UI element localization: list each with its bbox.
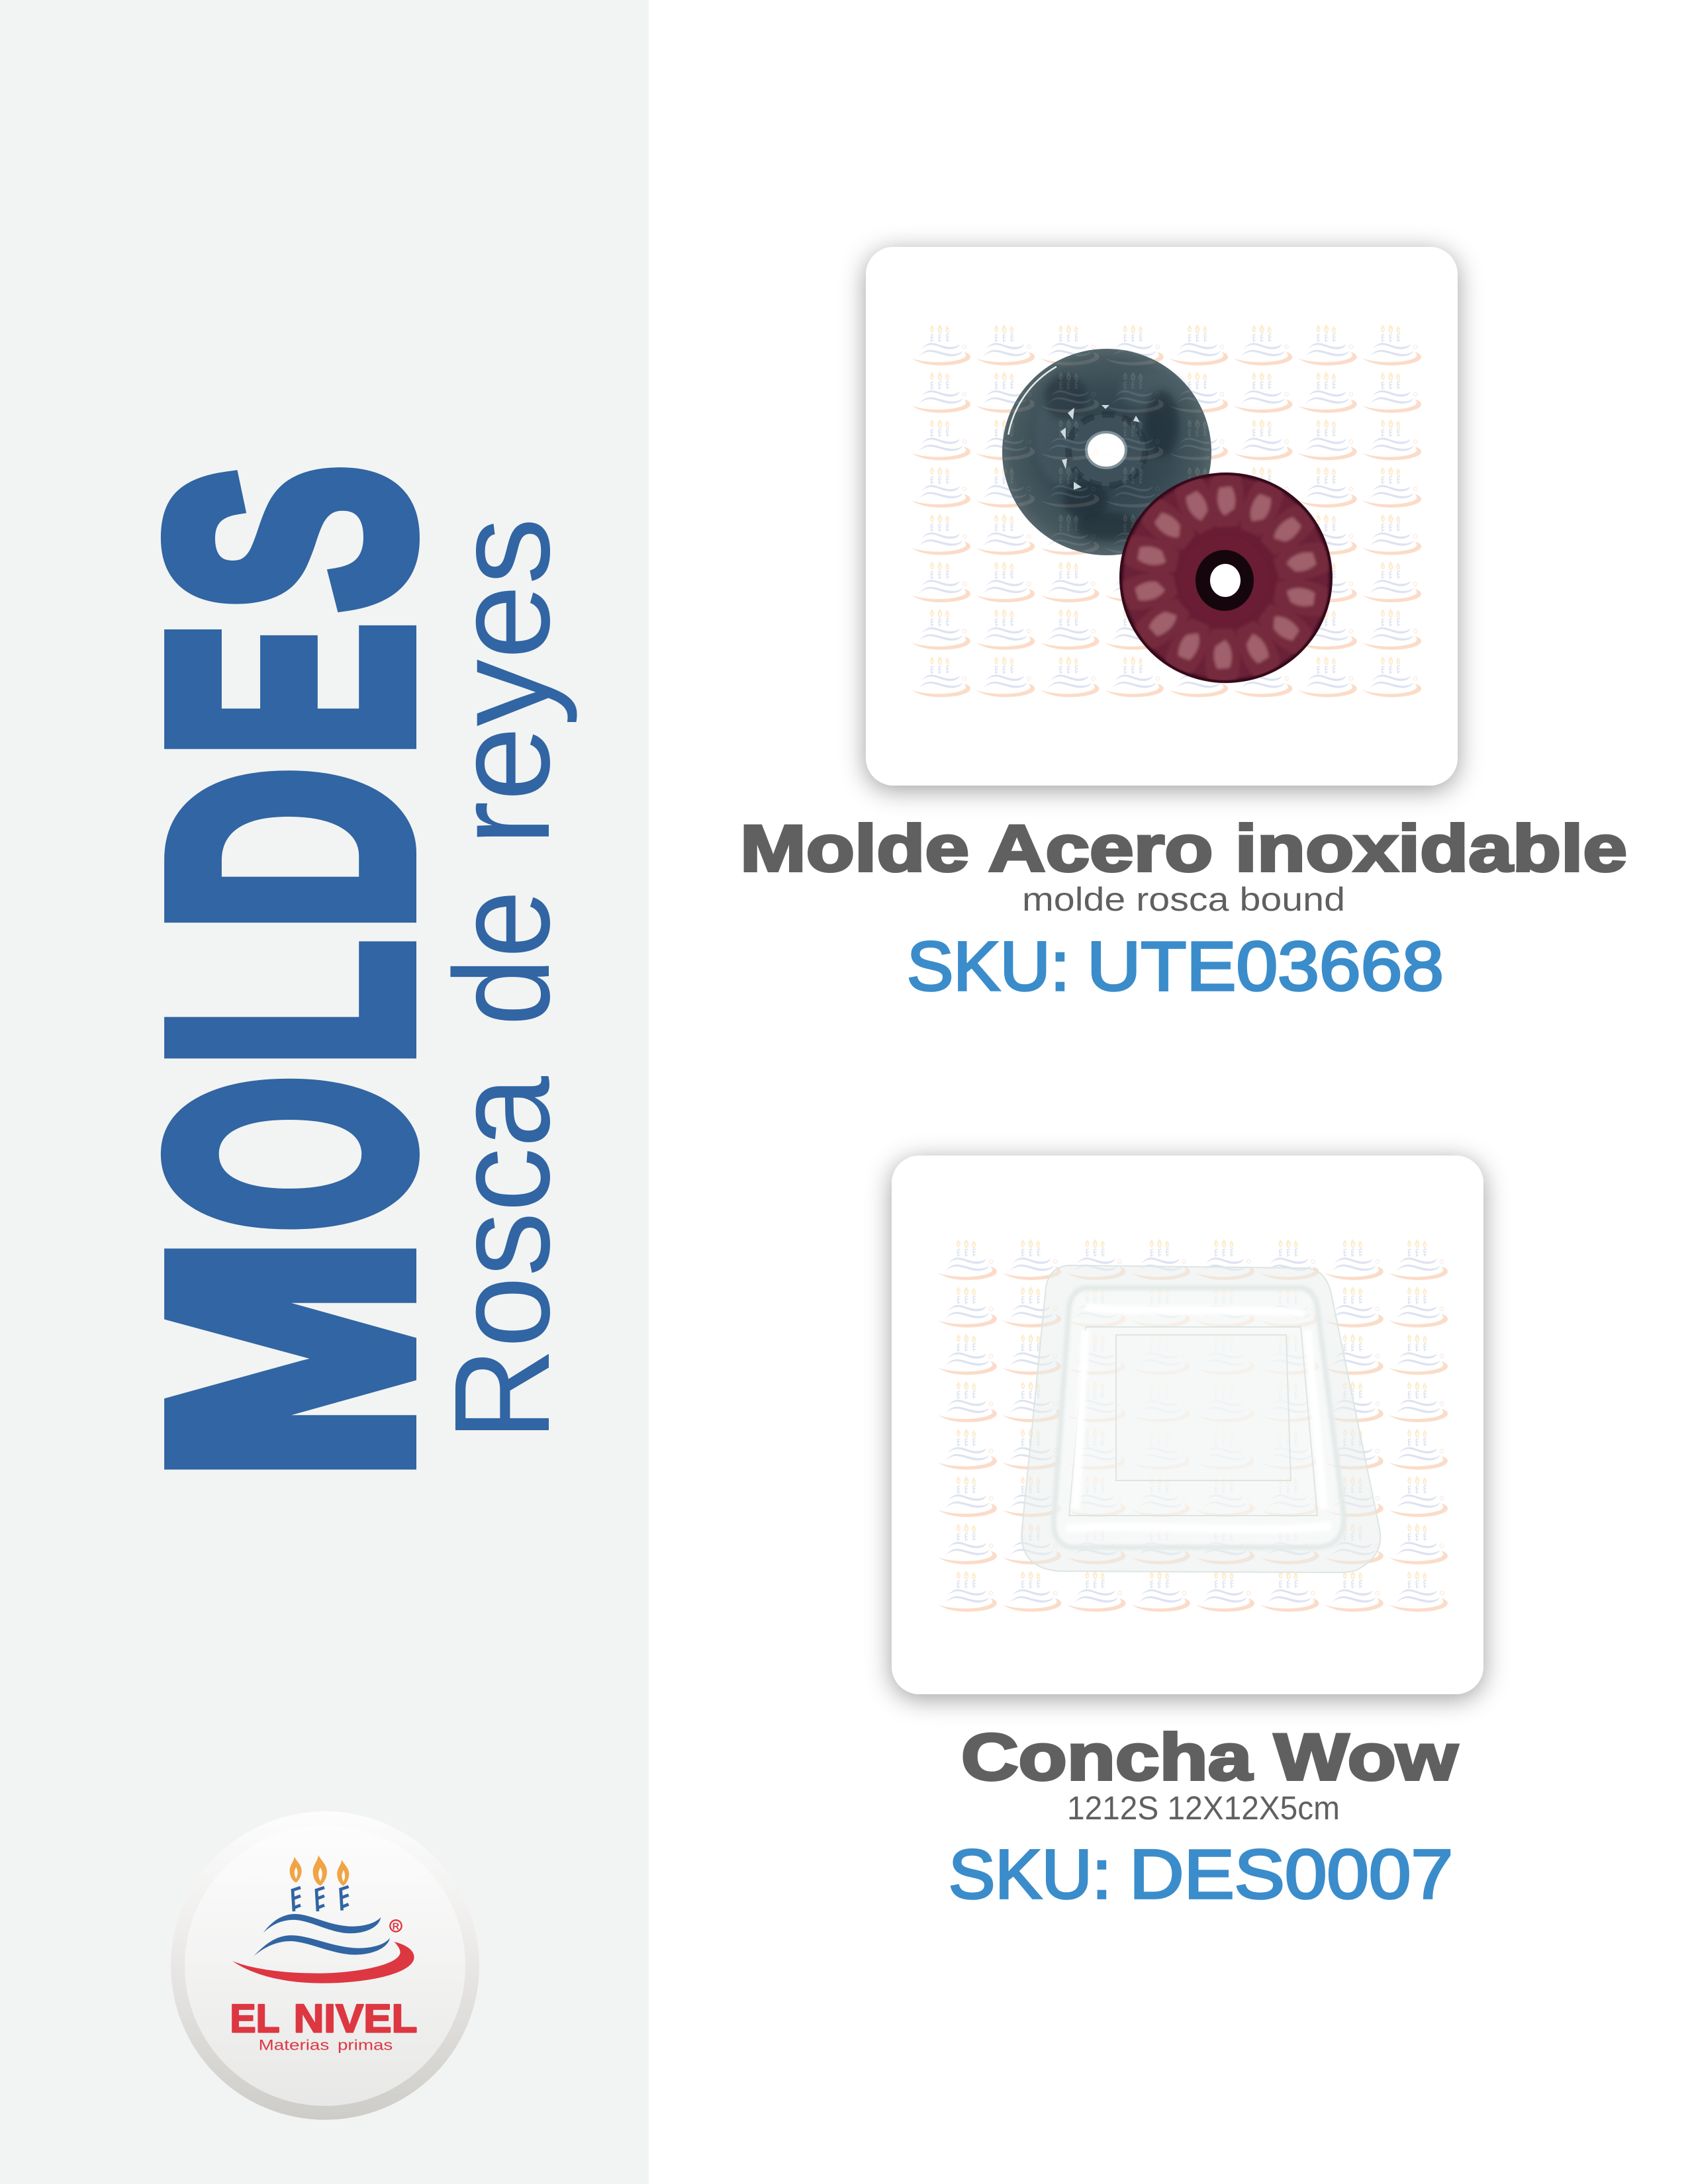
subheading: Rosca de reyes: Rosca: [426, 1075, 578, 1441]
card 2 background: [892, 1156, 1483, 1694]
card 1 background: [866, 247, 1458, 786]
subheading: Rosca de reyes: reyes: [426, 518, 578, 846]
product 2 SKU: DES0007: [1129, 1836, 1453, 1913]
burgundy mould: [1120, 473, 1332, 682]
product photo: clear plastic clamshell: [1021, 1265, 1380, 1572]
heading: MOLDES: S: [101, 465, 479, 611]
logo inner disc: [185, 1825, 465, 2106]
logo outer ring: [171, 1811, 479, 2120]
product 1 SKU: UTE03668: [1087, 928, 1444, 1005]
logo wordmark: EL: [230, 1996, 280, 2041]
dark mould: [991, 338, 1223, 567]
product 1 title: Molde Acero inoxidable: [740, 811, 1627, 885]
panel: product card 1: [866, 247, 1458, 786]
card 1 watermark pattern: [912, 324, 1427, 703]
logo tagline: primas: [338, 2036, 393, 2053]
logo tagline: Materias: [259, 2036, 329, 2053]
product 2 title: Concha Wow: [961, 1720, 1458, 1794]
heading: MOLDES: L: [101, 941, 479, 1066]
logo cake mark: [230, 1855, 417, 2053]
product photo: steel ring moulds: [991, 338, 1332, 682]
logo cake mark: R: [393, 1921, 400, 1932]
product 1 SKU: SKU:: [907, 928, 1070, 1005]
panel: product card 2: [892, 1156, 1483, 1694]
subheading: Rosca de reyes: de: [426, 890, 578, 1026]
panel: left sidebar: [0, 0, 649, 2184]
heading: MOLDES: O: [101, 1076, 479, 1232]
product 1 description: molde rosca bound: [1022, 881, 1345, 918]
logo: El Nivel badge: [171, 1811, 479, 2120]
product 2 description: 1212S 12X12X5cm: [1067, 1790, 1340, 1827]
heading: MOLDES: E: [101, 623, 479, 756]
logo wordmark: NIVEL: [294, 1996, 417, 2041]
card 2 watermark pattern: [938, 1239, 1453, 1617]
heading: MOLDES: M: [101, 1238, 479, 1480]
product 2 SKU: SKU:: [949, 1836, 1111, 1913]
heading: MOLDES: D: [101, 768, 479, 931]
